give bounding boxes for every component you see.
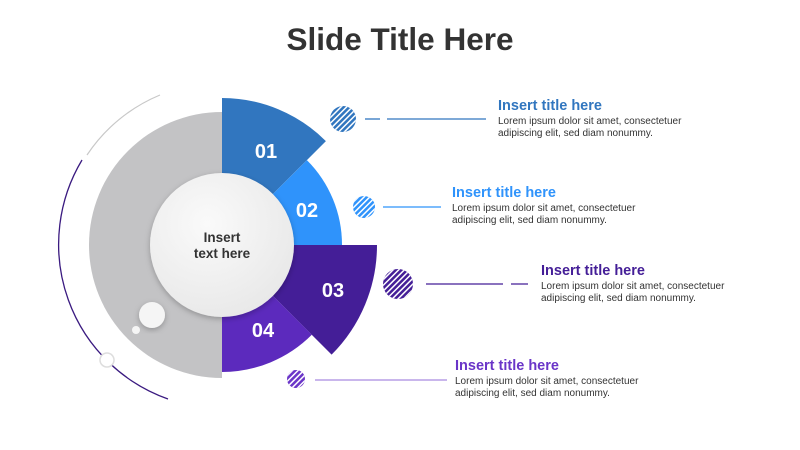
center circle: Insert [204, 230, 241, 245]
text block 4 [455, 358, 638, 399]
text: adipiscing elit, sed diam nonummy. [455, 388, 610, 399]
connector 4 [315, 379, 447, 381]
text: Lorem ipsum dolor sit amet, consectetuer [498, 116, 681, 127]
hatched icon 1 [330, 106, 356, 132]
title: Slide Title Here [286, 21, 514, 57]
center circle: text here [194, 246, 251, 261]
gray half disk [89, 112, 222, 378]
connector 1 [365, 118, 486, 120]
text: Lorem ipsum dolor sit amet, consectetuer [455, 376, 638, 387]
text block 1 [498, 98, 682, 139]
text: Insert title here [541, 263, 645, 279]
decorative arcs [59, 95, 168, 399]
text block 3 [541, 263, 724, 304]
segment 04 [222, 245, 312, 372]
hatched icon 3 [383, 269, 413, 299]
text: adipiscing elit, sed diam nonummy. [498, 128, 653, 139]
segment 02: 02 [296, 200, 318, 222]
connector 3 [426, 283, 528, 285]
text: adipiscing elit, sed diam nonummy. [541, 293, 696, 304]
segment 04: 04 [252, 320, 275, 342]
bubbles [132, 302, 165, 334]
segment 01 [222, 98, 326, 245]
text: adipiscing elit, sed diam nonummy. [452, 215, 607, 226]
hatched icon 4 [287, 370, 305, 388]
segment 02 [222, 160, 342, 245]
center circle [150, 173, 294, 317]
segment 03: 03 [322, 280, 344, 302]
segment 03 [222, 245, 377, 355]
text: Insert title here [455, 358, 559, 374]
connector 2 [383, 206, 441, 208]
segment 01: 01 [255, 141, 277, 163]
text: Lorem ipsum dolor sit amet, consectetuer [541, 281, 724, 292]
text: Lorem ipsum dolor sit amet, consectetuer [452, 203, 635, 214]
hatched icon 2 [353, 196, 375, 218]
text block 2 [452, 185, 636, 226]
text: Insert title here [498, 98, 602, 114]
text: Insert title here [452, 185, 556, 201]
